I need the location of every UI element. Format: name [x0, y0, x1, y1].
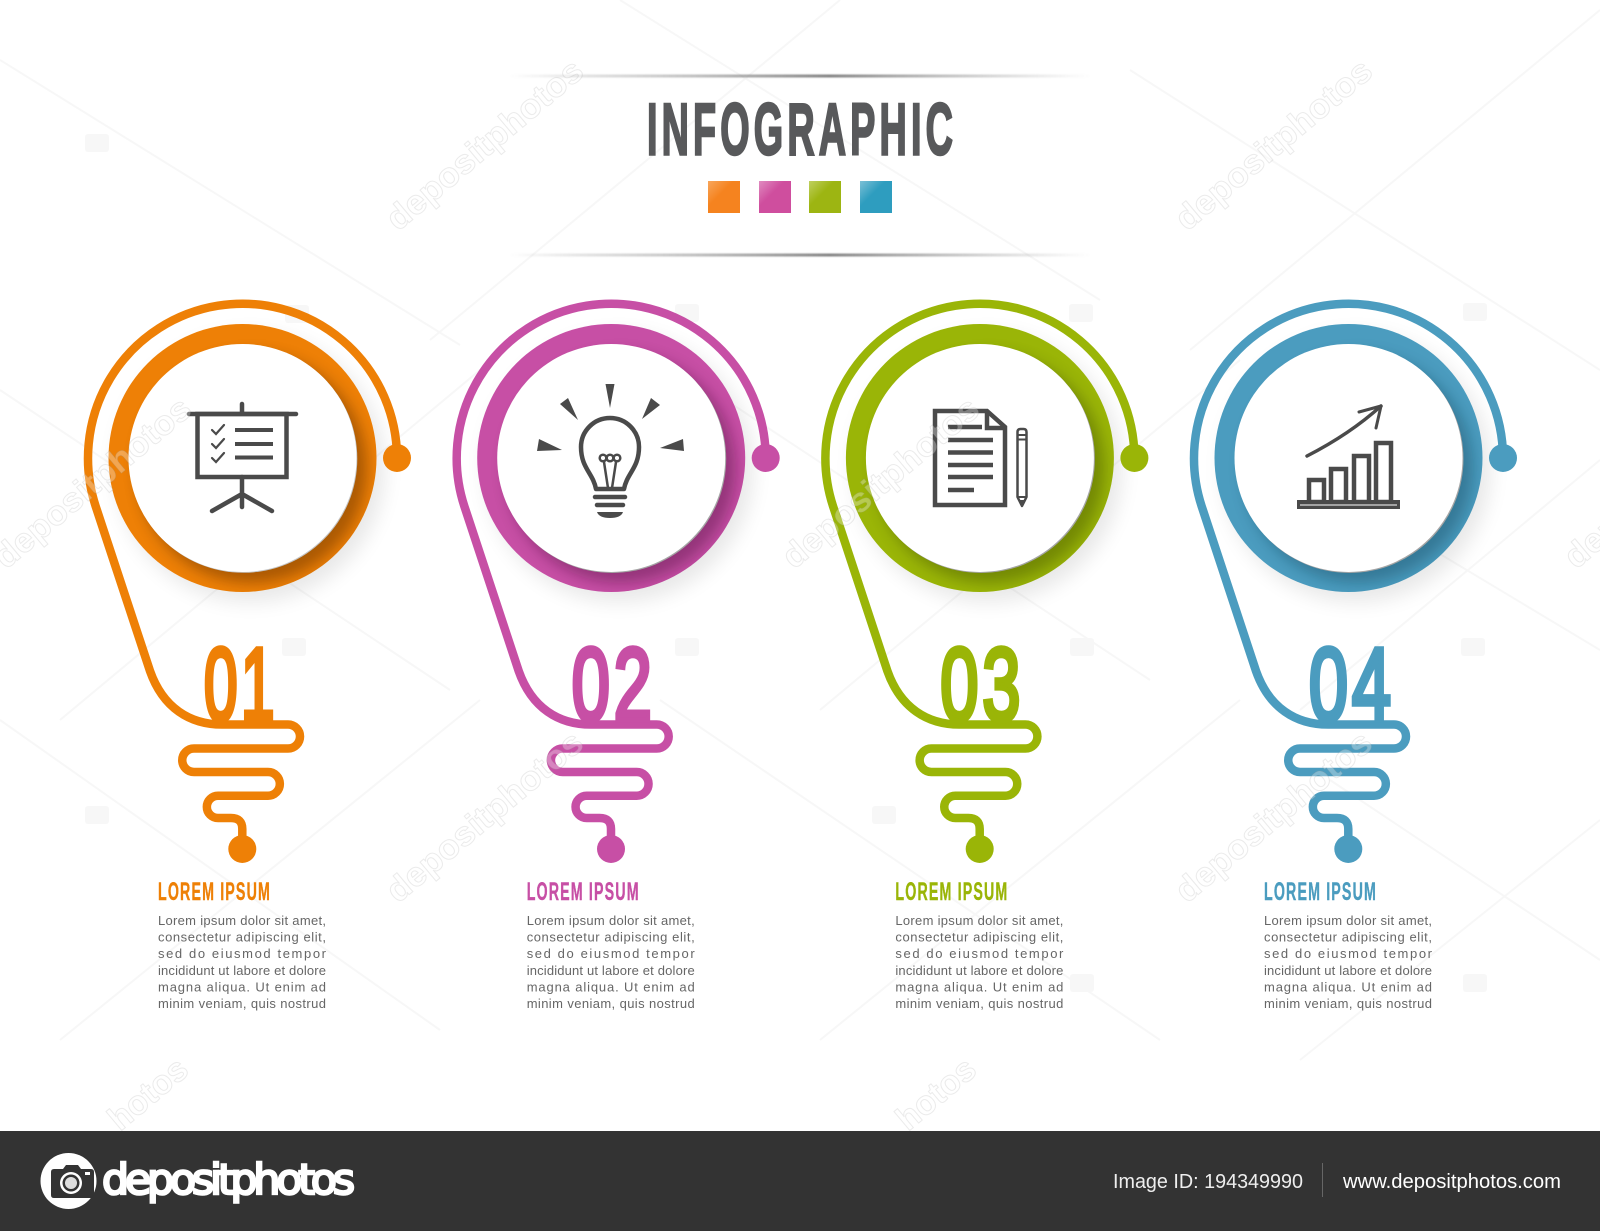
- description: sed do eiusmod tempor: [527, 946, 695, 961]
- number: 02: [572, 627, 656, 742]
- number: 04: [1309, 627, 1395, 742]
- description: Lorem ipsum dolor sit amet,: [1264, 913, 1432, 928]
- description: Lorem ipsum dolor sit amet,: [527, 913, 695, 928]
- watermarks: depositphotos: [1168, 52, 1380, 238]
- description: minim veniam, quis nostrud: [158, 996, 326, 1011]
- bulb wire: [1194, 304, 1517, 863]
- bulb wire: [457, 304, 780, 863]
- title: INFOGRAPHIC: [647, 90, 957, 170]
- watermarks: depositphotos: [1168, 724, 1380, 910]
- description: incididunt ut labore et dolore: [895, 963, 1063, 978]
- description: consectetur adipiscing elit,: [1264, 930, 1432, 944]
- watermarks: depositphotos: [379, 724, 591, 910]
- bulb wire: [825, 304, 1148, 863]
- thick ring: [1214, 324, 1482, 592]
- panel: step 04: [1194, 304, 1517, 1011]
- description: Lorem ipsum dolor sit amet,: [158, 913, 326, 928]
- colour swatches: [708, 181, 892, 213]
- description: consectetur adipiscing elit,: [527, 930, 695, 944]
- description: sed do eiusmod tempor: [895, 946, 1064, 961]
- panel: step 01: [88, 304, 411, 1011]
- icon: presentation board: [189, 404, 296, 511]
- thick ring: [846, 324, 1114, 592]
- thick ring: [108, 324, 376, 592]
- description: minim veniam, quis nostrud: [895, 996, 1063, 1011]
- number: 03: [940, 627, 1024, 742]
- heading: LOREM IPSUM: [895, 878, 1008, 906]
- footer logo icon: [40, 1153, 96, 1209]
- description: minim veniam, quis nostrud: [527, 996, 695, 1011]
- watermarks: depositphotos: [379, 52, 591, 238]
- heading: LOREM IPSUM: [1264, 878, 1377, 906]
- description: incididunt ut labore et dolore: [158, 963, 326, 978]
- icon: document and pencil: [935, 411, 1026, 507]
- icon: light bulb: [537, 384, 684, 518]
- panel: step 03: [825, 304, 1148, 1011]
- description: magna aliqua. Ut enim ad: [895, 980, 1063, 994]
- description: incididunt ut labore et dolore: [1264, 963, 1432, 978]
- top shadow divider: [510, 74, 1090, 78]
- heading: LOREM IPSUM: [527, 878, 640, 906]
- watermarks: hotos: [889, 1050, 984, 1138]
- description: sed do eiusmod tempor: [1264, 946, 1433, 961]
- description: incididunt ut labore et dolore: [527, 963, 695, 978]
- footer logo wordmark: depositphotos: [102, 1155, 353, 1204]
- description: [1264, 913, 1433, 1011]
- description: consectetur adipiscing elit,: [158, 930, 326, 944]
- number: 01: [204, 627, 278, 742]
- description: magna aliqua. Ut enim ad: [1264, 980, 1432, 994]
- watermarks: hotos: [101, 1050, 196, 1138]
- description: magna aliqua. Ut enim ad: [527, 980, 695, 994]
- description: consectetur adipiscing elit,: [895, 930, 1063, 944]
- description: sed do eiusmod tempor: [158, 946, 327, 961]
- watermarks: depositphotos: [775, 390, 987, 576]
- description: Lorem ipsum dolor sit amet,: [895, 913, 1063, 928]
- description: magna aliqua. Ut enim ad: [158, 980, 326, 994]
- icon: growth chart: [1297, 406, 1400, 509]
- description: minim veniam, quis nostrud: [1264, 996, 1432, 1011]
- description: [527, 913, 695, 1011]
- image id: Image ID: 194349990: [1113, 1171, 1303, 1193]
- description: [895, 913, 1064, 1011]
- description: [158, 913, 327, 1011]
- thick ring: [477, 324, 745, 592]
- heading: LOREM IPSUM: [158, 878, 271, 906]
- website url: www.depositphotos.com: [1342, 1171, 1561, 1193]
- panel: step 02: [457, 304, 780, 1011]
- footer bar: [0, 1131, 1600, 1231]
- bulb wire: [88, 304, 411, 863]
- bottom shadow divider: [510, 254, 1090, 256]
